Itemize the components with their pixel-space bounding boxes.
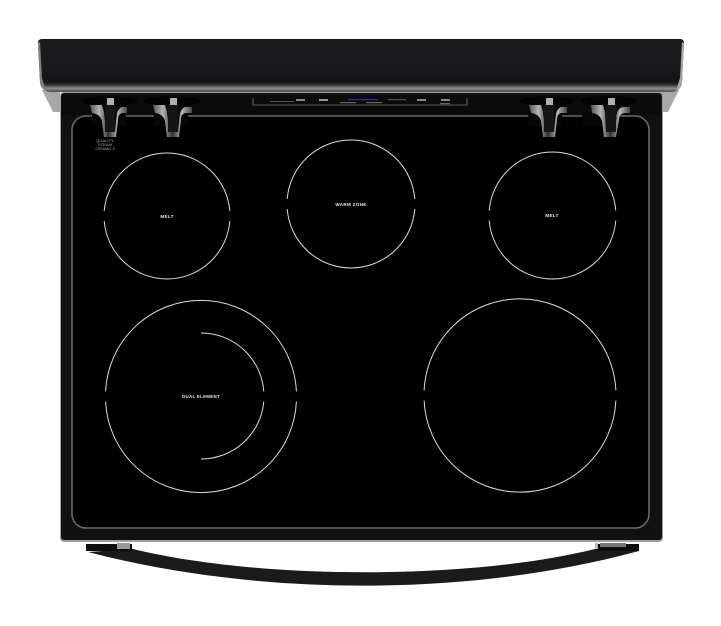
control display [253, 98, 467, 105]
badge: quality mark: CERAMIC 8 [95, 147, 115, 151]
label: warm zone: WARM ZONE [335, 202, 367, 207]
side brackets [42, 90, 679, 112]
badge: quality mark: STEAM [98, 142, 113, 147]
burner: rear left, melt [104, 153, 230, 279]
icon: control knob 1 [82, 96, 138, 137]
burner: front right [424, 299, 616, 492]
icon: control knob 4 [581, 96, 637, 137]
burner: center, warm zone [287, 140, 415, 268]
cooktop body [60, 92, 663, 542]
burner: front left, dual element [106, 300, 296, 493]
icon: control knob 2 [144, 96, 200, 137]
label: dual element: DUAL ELEMENT [182, 394, 220, 399]
oven door handle [86, 543, 639, 586]
glass cooktop surface with trim [62, 95, 660, 528]
rear control panel [38, 39, 684, 92]
label: melt right: MELT [545, 213, 559, 218]
burner: rear right, melt [489, 152, 616, 279]
label: melt left: MELT [160, 214, 174, 219]
badge: quality mark: QUALITY [96, 138, 114, 143]
icon: control knob 3 [519, 96, 575, 137]
badge: quality mark [95, 138, 115, 151]
